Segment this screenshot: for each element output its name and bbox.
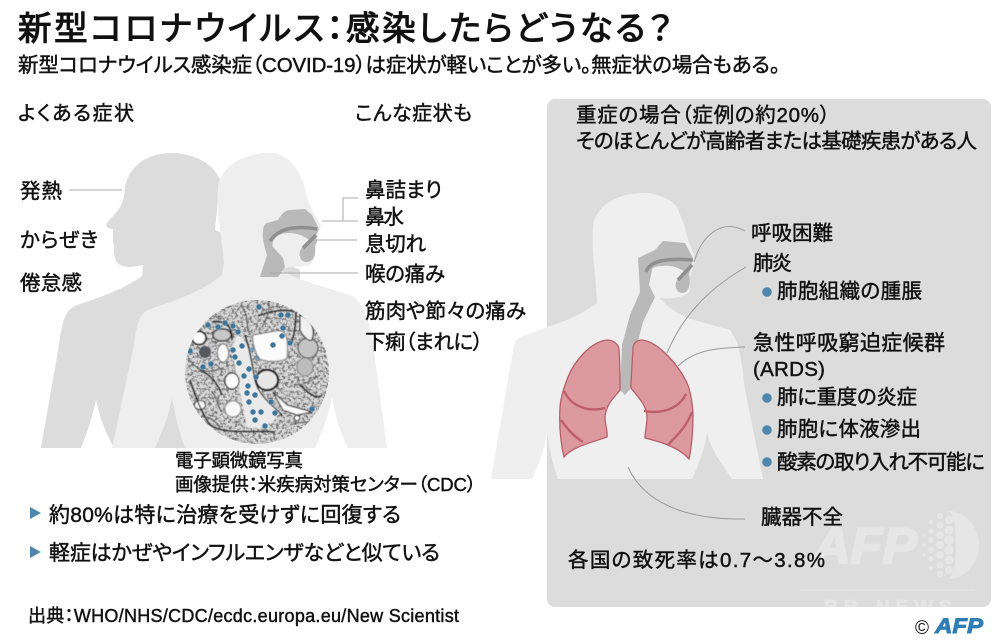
symptom: pneumonia: 肺炎 <box>753 252 792 275</box>
silhouette: patient body <box>491 193 763 479</box>
airway: front person <box>260 209 319 277</box>
airway shading: patient <box>646 259 693 280</box>
bullet: fluid: 肺胞に体液滲出 <box>777 418 921 441</box>
fatality rate: 各国の致死率は0.7〜3.8% <box>568 549 825 572</box>
watermark: AFP: AFP <box>811 518 918 574</box>
heading: severe cases: 重症の場合（症例の約20%） <box>576 104 830 127</box>
heading: mostly elderly: そのほとんどが高齢者または基礎疾患がある人 <box>576 130 977 153</box>
panel: severe cases <box>491 99 991 619</box>
right lung <box>631 340 693 459</box>
bullet: swelling: 肺胞組織の腫脹 <box>777 280 922 303</box>
symptom: shortness of breath: 息切れ <box>365 233 426 256</box>
panel background <box>547 99 991 607</box>
symptom: muscle and joint pain: 筋肉や節々の痛み <box>365 300 526 323</box>
watermark: AFP: BB NEWS <box>824 597 952 619</box>
title: 新型コロナウイルス：感染したらどうなる？ <box>18 11 672 48</box>
symptom: cough: からぜき <box>20 229 98 252</box>
takeaway 1: 約80%は特に治療を受けずに回復する <box>49 504 401 527</box>
source: 出典：WHO/NHS/CDC/ecdc.europa.eu/New Scientist <box>28 606 459 626</box>
watermark: AFP <box>800 512 979 607</box>
bullet: inflammation: 肺に重度の炎症 <box>777 386 917 409</box>
silhouette: front person <box>112 153 387 448</box>
symptom: diarrhea: 下痢（まれに） <box>365 331 483 354</box>
caption <box>175 450 476 495</box>
panel: common and other symptoms <box>18 102 526 448</box>
arrow bullet 1 <box>30 507 41 519</box>
AFP logo: AFP <box>934 615 984 638</box>
symptom: sore throat: 喉の痛み <box>365 263 445 286</box>
heading: common symptoms: よくある症状 <box>18 102 134 125</box>
symptom: ARDS: 急性呼吸窮迫症候群 <box>753 332 945 355</box>
bullet: oxygen: 酸素の取り入れ不可能に <box>777 451 985 474</box>
symptom: stuffy nose: 鼻詰まり <box>365 179 442 202</box>
subtitle: 新型コロナウイルス感染症（COVID-19）は症状が軽いことが多い。無症状の場合もある。 <box>18 54 780 77</box>
silhouette: back person <box>41 153 300 448</box>
symptom: fever: 発熱 <box>20 180 62 203</box>
symptom: runny nose: 鼻水 <box>365 206 404 229</box>
heading: other symptoms: こんな症状も <box>355 102 472 125</box>
symptom: organ failure: 臓器不全 <box>761 506 843 529</box>
caption line 2: 画像提供：米疾病対策センター（CDC） <box>175 474 476 495</box>
symptom: ARDS abbreviation: (ARDS) <box>753 358 825 381</box>
label lines <box>69 190 358 273</box>
airway: patient <box>620 241 693 395</box>
copyright mark: © <box>915 618 929 639</box>
takeaway 2: 軽症はかぜやインフルエンザなどと似ている <box>49 542 440 565</box>
leader lines <box>628 227 746 519</box>
symptom: difficulty breathing: 呼吸困難 <box>751 222 833 245</box>
takeaways <box>30 504 440 565</box>
symptom: fatigue: 倦怠感 <box>20 272 82 295</box>
electron micrograph <box>184 299 330 445</box>
caption line 1: 電子顕微鏡写真 <box>175 450 303 471</box>
credit: AFP <box>915 615 984 639</box>
arrow bullet 2 <box>30 546 41 558</box>
left lung <box>560 340 620 457</box>
airway shading <box>270 227 317 248</box>
